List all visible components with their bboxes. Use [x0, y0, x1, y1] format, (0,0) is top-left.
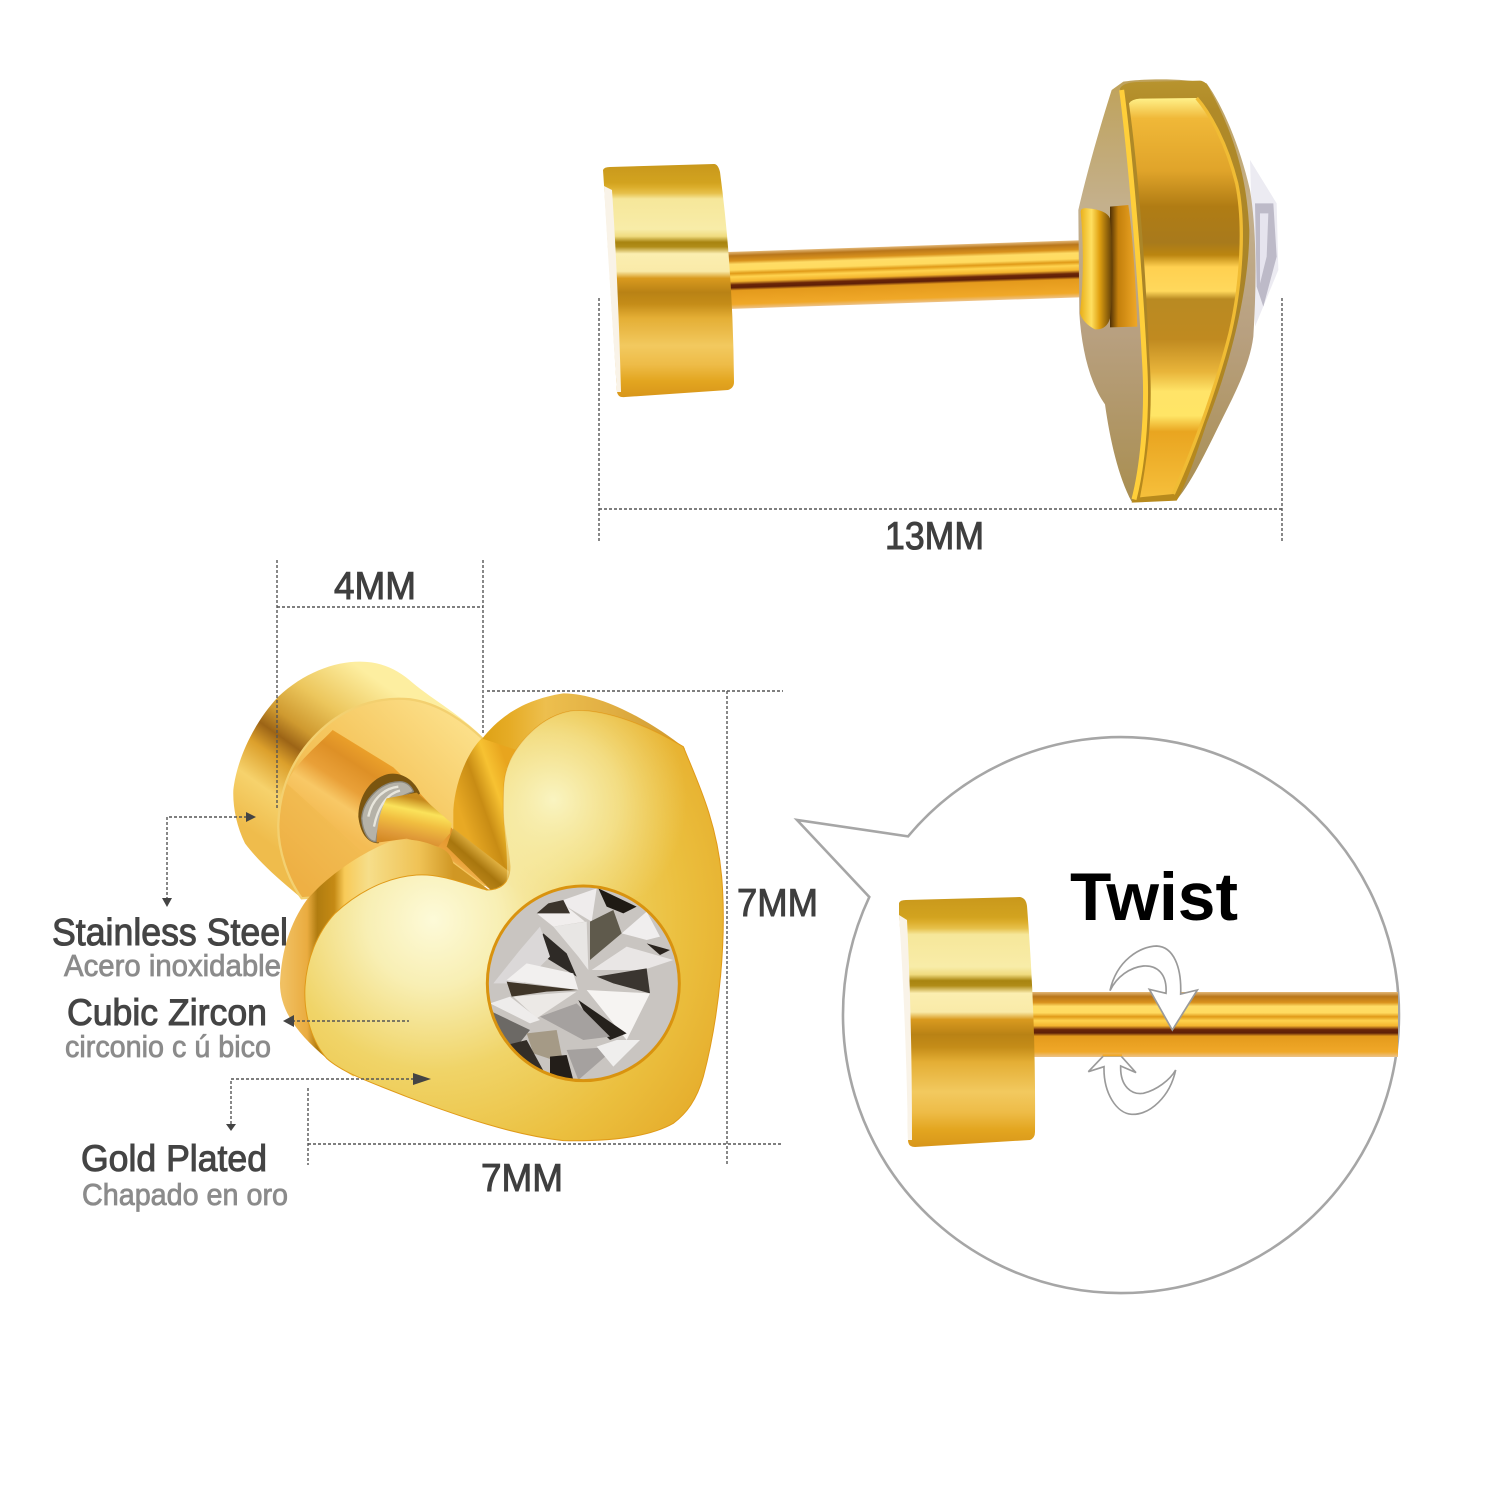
gem bezel: [487, 886, 679, 1081]
back cylinder: [233, 662, 487, 898]
heading: Twist: Twist: [1070, 859, 1238, 935]
dimension: heart height 7MM: 7MM: [737, 882, 818, 925]
callout: Cubic Zircon: Cubic Zircon: [67, 992, 267, 1033]
back disc face: [278, 699, 507, 898]
callout: Stainless Steel: Acero inoxidable: [64, 948, 281, 983]
earring front view: [233, 662, 723, 1141]
gem facets: [488, 888, 673, 1080]
zircon gem: [483, 883, 683, 1083]
shaft: [287, 730, 508, 891]
upper arrow: [1110, 946, 1197, 1030]
heart lower side wall: [280, 840, 507, 1077]
callout: Gold Plated: Chapado en oro: [82, 1177, 288, 1212]
pin tip: [377, 793, 452, 847]
pin: [1030, 992, 1398, 1057]
callout: Cubic Zircon: circonio c ú bico: [65, 1029, 271, 1064]
heart: side view: [1078, 79, 1278, 503]
heart upper side wall: [482, 693, 685, 783]
washer: [1110, 205, 1137, 327]
cap: [899, 897, 1035, 1147]
dimension: heart width 7MM: 7MM: [481, 1157, 563, 1200]
dimension: 13MM: 13MM: [885, 515, 984, 558]
earring side view: [603, 79, 1278, 503]
dimension: heart height 7MM: [487, 691, 818, 1165]
pin: side view: [727, 240, 1091, 309]
icon: twist arrows: [1088, 946, 1197, 1114]
dimension: 13MM: [599, 298, 1282, 558]
callout: Stainless Steel: Stainless Steel: [52, 912, 288, 954]
callout: Cubic Zircon: [65, 992, 409, 1064]
heart front face: [305, 710, 723, 1141]
steel ring: [358, 774, 420, 843]
dimension: 4MM: 4MM: [334, 565, 416, 608]
speech bubble: [797, 737, 1399, 1293]
lower arrow: [1088, 1056, 1176, 1114]
cap: side view: [603, 164, 734, 397]
gem tip: [1250, 160, 1278, 327]
dimension: heart width 7MM: [308, 1088, 783, 1200]
gem base: [483, 883, 683, 1083]
callout: Gold Plated: Gold Plated: [81, 1138, 267, 1179]
callout: Gold Plated: [81, 1073, 431, 1212]
callout: Stainless Steel: [52, 812, 288, 983]
dimension: 4MM: [277, 560, 483, 810]
bubble: pin detail: [899, 897, 1398, 1147]
